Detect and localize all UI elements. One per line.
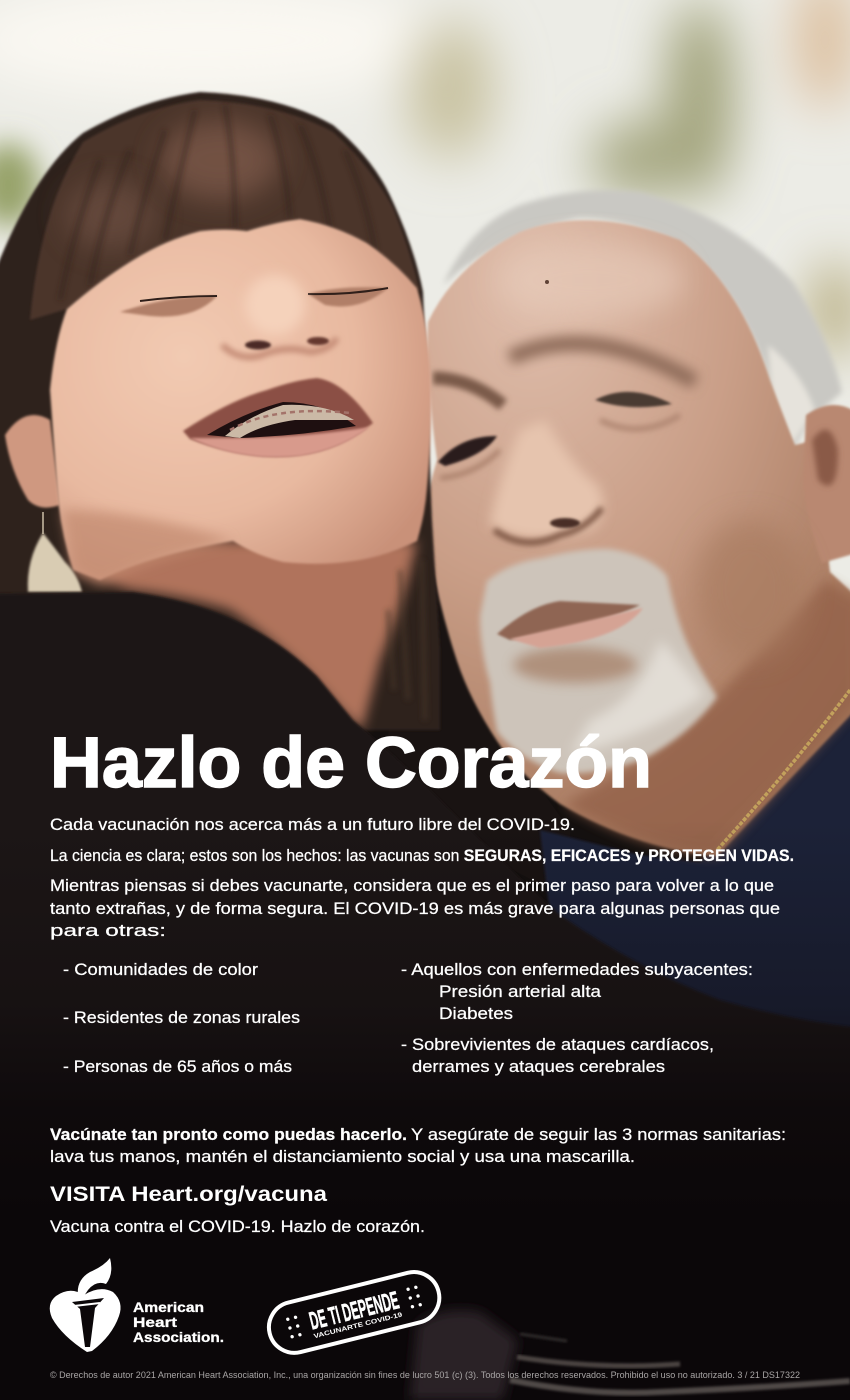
logo wordmark: Heart xyxy=(133,1314,177,1330)
list: left column: - Comunidades de color xyxy=(63,961,259,979)
forehead highlight xyxy=(495,242,685,318)
De Ti Depende bandage stamp xyxy=(264,1267,445,1358)
copyright footer: © Derechos de autor 2021 American Heart Association, Inc., una organización sin fines de lucro 501 (c) (3). Todos los derechos reservados. Prohibido el uso no autorizado. 3 / 21 DS17322 xyxy=(50,1370,800,1380)
list: right column: derrames y ataques cerebrales xyxy=(412,1058,665,1076)
intro text: tanto extrañas, y de forma segura. El COVID-19 es más grave para algunas personas que xyxy=(50,900,780,918)
left eyebrow xyxy=(433,378,503,405)
right eyebrow xyxy=(510,344,695,382)
mouth interior xyxy=(207,402,356,438)
lips xyxy=(183,378,373,457)
woman's black sweater xyxy=(0,592,850,1400)
list: left column xyxy=(63,961,300,1076)
ear xyxy=(803,405,850,563)
woman's nose xyxy=(222,275,337,357)
hair xyxy=(443,190,842,455)
intro text: Mientras piensas si debes vacunarte, considera que es el primer paso para volver a lo que xyxy=(50,877,774,895)
list: left column: - Residentes de zonas rurales xyxy=(63,1009,300,1027)
De Ti Depende bandage stamp: DE TI DEPENDE xyxy=(307,1286,402,1336)
website link: VISITA Heart.org/vacuna xyxy=(50,1183,327,1206)
nose xyxy=(490,420,603,542)
left eye xyxy=(438,436,500,478)
logo wordmark xyxy=(133,1299,224,1345)
logo wordmark: Association. xyxy=(133,1329,224,1345)
hair strands beside neck xyxy=(388,560,425,720)
closed eyes xyxy=(120,287,388,317)
American Heart Association logo xyxy=(50,1258,224,1352)
lower arm tones xyxy=(410,1310,850,1400)
list: right column xyxy=(401,961,753,1076)
woman's neck xyxy=(73,541,417,730)
call to action text: lava tus manos, mantén el distanciamiento social y usa una mascarilla. xyxy=(50,1148,635,1166)
mole xyxy=(545,280,549,284)
call to action text: Vacúnate tan pronto como puedas hacerlo. xyxy=(50,1126,407,1144)
lower left cheek shadow xyxy=(62,510,233,585)
gold necklace xyxy=(717,690,850,850)
list: right column: - Aquellos con enfermedades subyacentes: xyxy=(401,961,753,979)
man's head xyxy=(423,190,850,856)
goatee xyxy=(480,549,717,773)
closing tagline: Vacuna contra el COVID-19. Hazlo de corazón. xyxy=(50,1218,425,1236)
earring xyxy=(28,512,82,592)
smile xyxy=(183,378,373,457)
intro text xyxy=(50,816,794,940)
list: right column: - Sobrevivientes de ataques cardíacos, xyxy=(401,1036,714,1054)
list: right column: Presión arterial alta xyxy=(439,983,602,1001)
right eye xyxy=(595,392,680,429)
intro text: Cada vacunación nos acerca más a un futuro libre del COVID-19. xyxy=(50,816,575,834)
dark gap between the two heads xyxy=(380,520,570,900)
intro text: La ciencia es clara; estos son los hechos: las vacunas son SEGURAS, EFICACES y PROTEGEN VIDAS. xyxy=(50,847,794,865)
stamp subheading: VACUNARTE COVID-19 xyxy=(313,1311,403,1340)
woman's bangs xyxy=(30,100,420,320)
mouth xyxy=(497,601,643,648)
teeth and braces xyxy=(225,405,354,438)
lower dark gradient xyxy=(0,820,850,1400)
man's shirt xyxy=(540,700,850,1040)
list: left column: - Personas de 65 años o más xyxy=(63,1058,292,1076)
call to action text xyxy=(50,1126,786,1166)
woman's back hair xyxy=(0,92,440,730)
list: right column: Diabetes xyxy=(439,1005,513,1023)
right cheek shadow xyxy=(695,520,805,660)
woman's ear xyxy=(5,415,60,508)
call to action text: Y asegúrate de seguir las 3 normas sanitarias: xyxy=(411,1126,786,1144)
icon: heart and torch xyxy=(50,1258,121,1352)
intro text: para otras: xyxy=(50,922,166,940)
logo wordmark: American xyxy=(133,1299,204,1315)
inner ear xyxy=(812,430,838,486)
woman's face xyxy=(50,219,431,580)
neck shadow xyxy=(565,580,850,856)
title: Hazlo de Corazón xyxy=(50,724,652,803)
stamp dots xyxy=(286,1285,422,1339)
face and neck xyxy=(423,220,850,856)
